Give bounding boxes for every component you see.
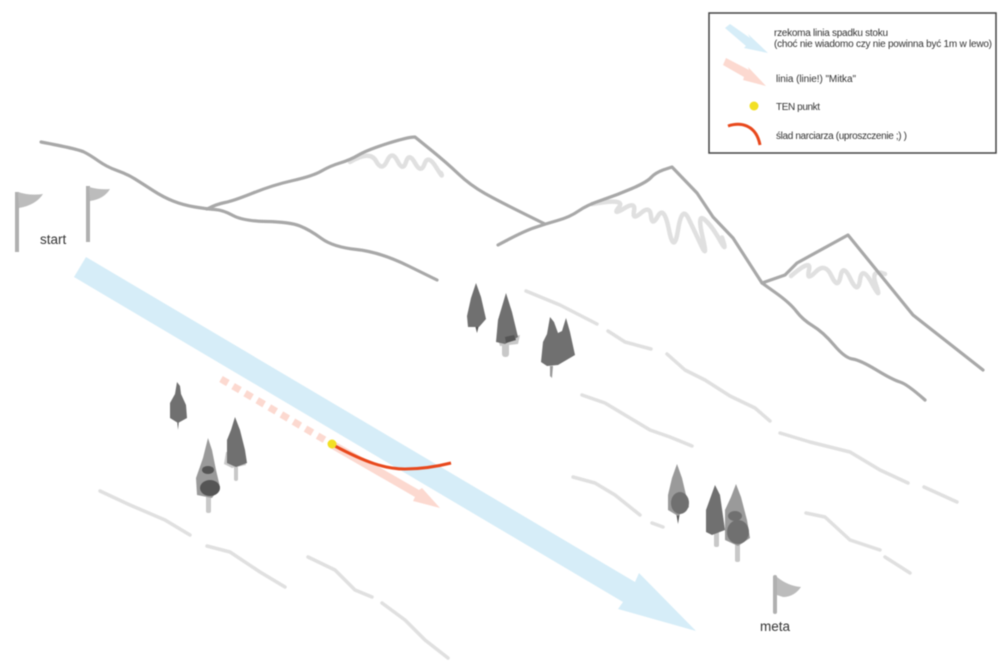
flag: start left: [17, 192, 43, 252]
tree: [541, 317, 575, 378]
legend: pink arrow: [723, 58, 766, 86]
tree: [496, 293, 520, 357]
piste contour lines: [100, 291, 957, 658]
ridge: left slope: [41, 142, 437, 280]
skier track: [335, 446, 451, 469]
legend text: yellow dot: TEN punkt: [776, 102, 820, 113]
tree: [224, 417, 247, 481]
legend text: blue arrow: rzekoma linia spadku stoku: [774, 28, 888, 39]
tree: [196, 438, 220, 513]
legend frame: [709, 13, 996, 153]
label: start: start: [40, 232, 67, 247]
legend text: pink arrow: linia (linie!) "Mitka": [776, 74, 856, 85]
legend: red arc: [728, 124, 760, 145]
mountain 1: [207, 137, 545, 224]
arrow: blue fall line: [74, 257, 696, 631]
tree: [668, 464, 689, 524]
dashed pink line: [221, 379, 330, 443]
legend: blue arrow: [725, 24, 768, 53]
flag: start right: [88, 186, 110, 242]
tree: [706, 485, 725, 547]
tree group: left: [170, 382, 247, 513]
tree: [467, 283, 486, 333]
tree: [725, 484, 750, 562]
mountain 3: [762, 235, 983, 370]
label: meta: meta: [760, 619, 791, 634]
arrow: pink line: [330, 441, 440, 508]
mountain range: [41, 137, 983, 400]
legend text: red arc: ślad narciarza (uproszczenie ;) ): [776, 131, 907, 142]
legend: [709, 13, 996, 153]
legend text: blue arrow: (choć nie wiadomo czy nie powinna być 1m w lewo): [774, 39, 992, 50]
legend: yellow dot: [750, 102, 758, 110]
legend text: blue arrow: [774, 28, 992, 50]
tree: [170, 382, 187, 430]
tree group: bottom right: [668, 464, 750, 562]
yellow point: [328, 440, 336, 448]
flag: finish: [775, 577, 801, 612]
mountain 2: [498, 167, 925, 400]
tree group: top: [467, 283, 575, 378]
